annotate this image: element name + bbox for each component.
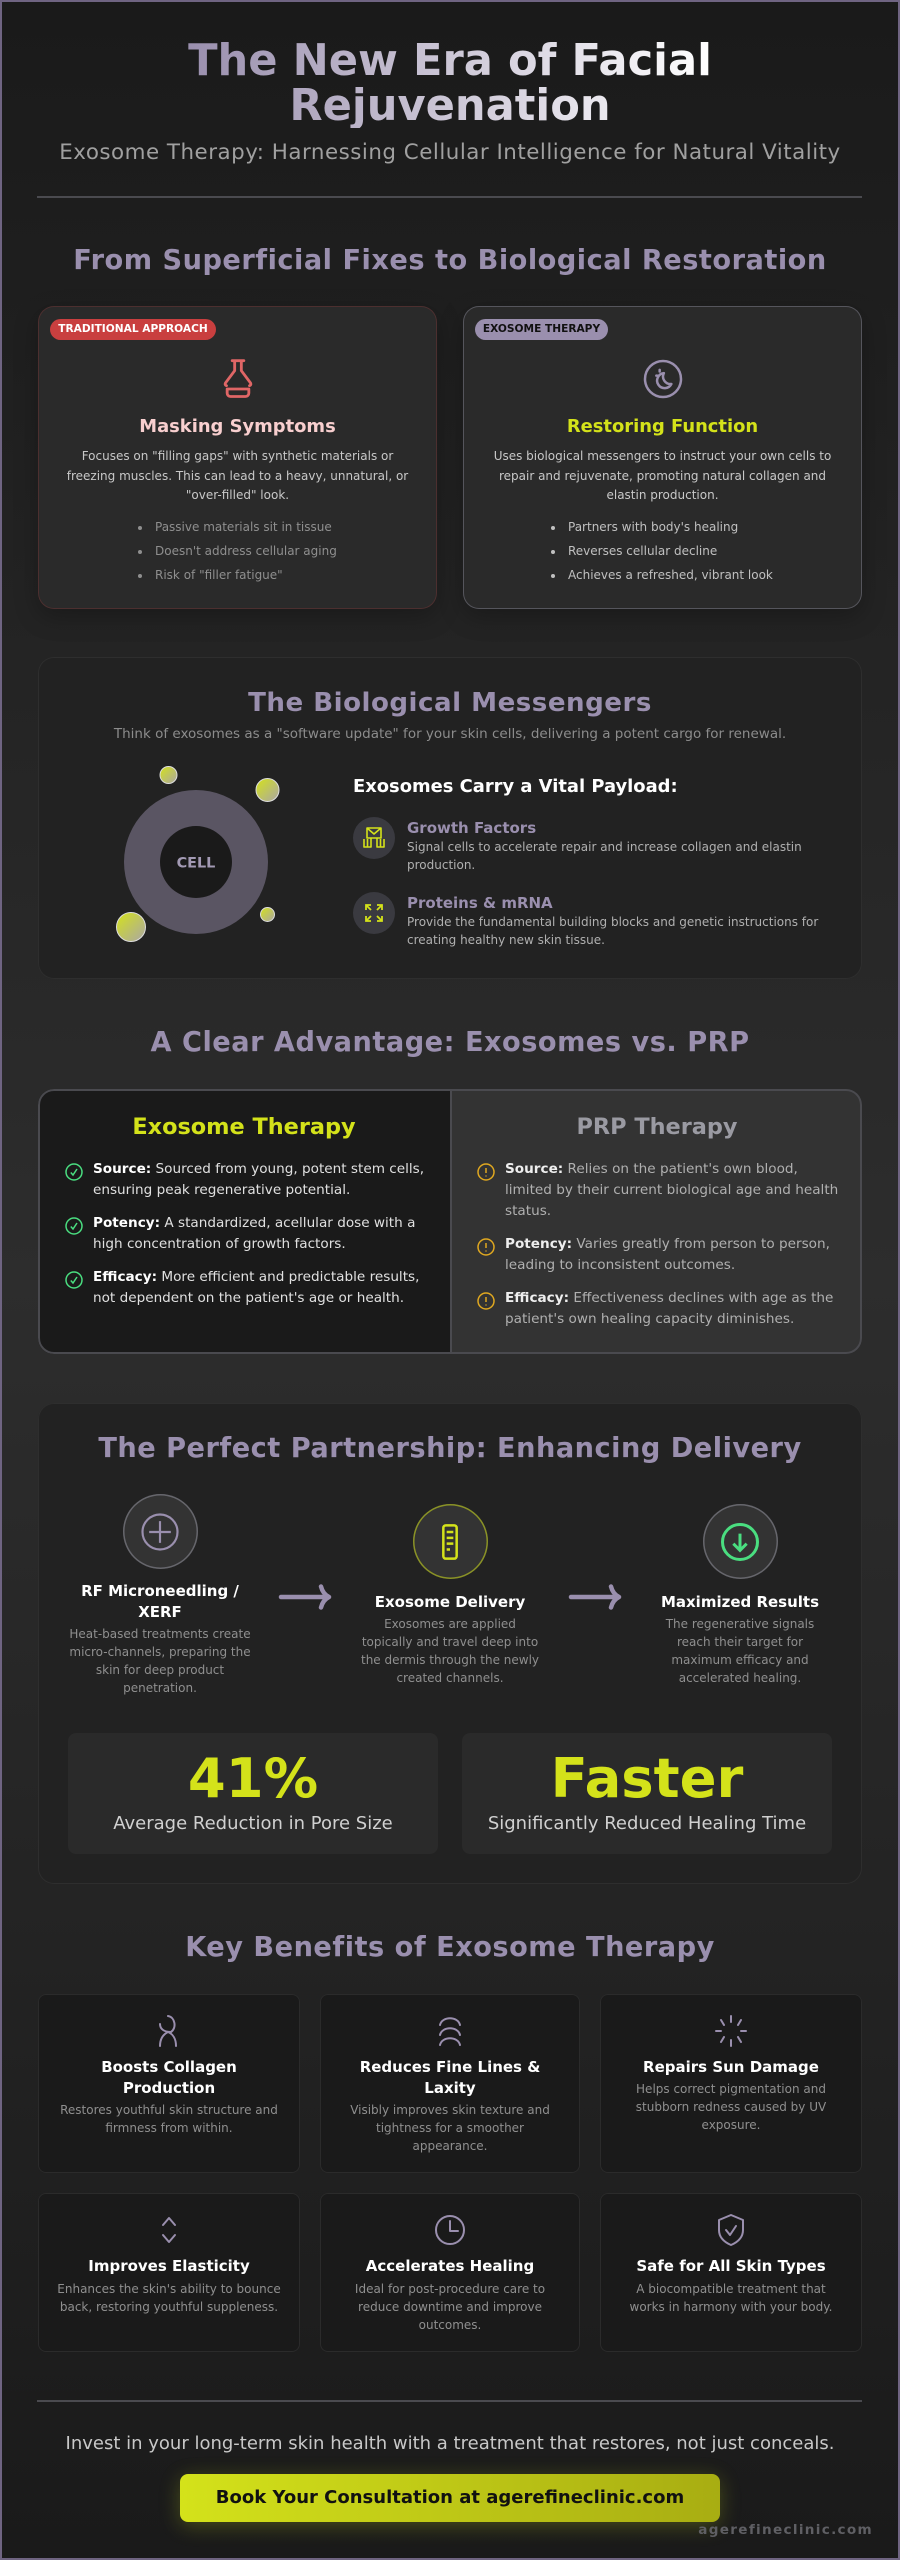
panel: traditional approach bbox=[38, 306, 437, 609]
header bbox=[37, 36, 862, 198]
benefit title: Repairs Sun Damage bbox=[643, 2058, 819, 2076]
stat number: 41% bbox=[188, 1747, 318, 1810]
proteins text bbox=[407, 915, 818, 947]
benefit text bbox=[57, 2282, 281, 2314]
proteins title: Proteins & mRNA bbox=[407, 894, 553, 912]
title: The New Era of Facial bbox=[188, 36, 712, 86]
benefit text: reduce downtime and improve bbox=[358, 2300, 542, 2314]
heading: The Biological Messengers bbox=[248, 688, 652, 718]
badge: traditional approach: TRADITIONAL APPROACH bbox=[58, 323, 208, 335]
stat label: Significantly Reduced Healing Time bbox=[488, 1813, 806, 1834]
panel: exosome therapy bbox=[463, 306, 862, 609]
card description: repair and rejuvenate, promoting natural collagen and bbox=[499, 469, 826, 483]
benefit text bbox=[350, 2103, 550, 2153]
benefit title: Improves Elasticity bbox=[88, 2257, 250, 2275]
call to action button: Book Your Consultation at agerefineclinic.com bbox=[216, 2487, 684, 2508]
badge: traditional approach bbox=[50, 319, 216, 340]
step text: maximum efficacy and bbox=[671, 1653, 809, 1667]
column title: Exosome Therapy bbox=[132, 1114, 356, 1140]
benefit text bbox=[355, 2282, 545, 2332]
badge: exosome therapy: EXOSOME THERAPY bbox=[483, 323, 600, 335]
step text bbox=[361, 1617, 539, 1685]
row: source bbox=[65, 1161, 424, 1198]
list: exosome benefits: Partners with body's healing bbox=[568, 520, 738, 534]
benefit title: Reduces Fine Lines & bbox=[360, 2058, 540, 2076]
row: potency bbox=[477, 1236, 830, 1273]
icon: growth factors bbox=[353, 817, 395, 859]
benefit text: firmness from within. bbox=[105, 2121, 233, 2135]
growth factors text bbox=[407, 840, 802, 872]
stat number: Faster bbox=[551, 1747, 743, 1810]
icon: flask bbox=[224, 359, 252, 398]
step title bbox=[81, 1582, 239, 1621]
benefit text: A biocompatible treatment that bbox=[636, 2282, 826, 2296]
icon: plus circle bbox=[122, 1494, 198, 1569]
row: efficacy: patient's own healing capacity diminishes. bbox=[505, 1311, 794, 1327]
subtitle: Exosome Therapy: Harnessing Cellular Intelligence for Natural Vitality bbox=[59, 140, 841, 165]
row: source: ensuring peak regenerative potential. bbox=[93, 1182, 350, 1198]
step text: Heat-based treatments create bbox=[69, 1627, 251, 1641]
icon: shield check bbox=[718, 2214, 744, 2246]
list: traditional drawbacks: Doesn't address cellular aging bbox=[155, 544, 337, 558]
step text bbox=[666, 1617, 814, 1685]
benefit text: works in harmony with your body. bbox=[630, 2300, 832, 2314]
proteins text: Provide the fundamental building blocks and genetic instructions for bbox=[407, 915, 818, 929]
closing statement: Invest in your long-term skin health with a treatment that restores, not just conceals. bbox=[66, 2433, 834, 2454]
card description bbox=[67, 449, 408, 502]
row: efficacy bbox=[477, 1290, 833, 1327]
card title: Restoring Function bbox=[567, 416, 758, 437]
row: source: status. bbox=[505, 1203, 551, 1219]
footer bbox=[0, 2400, 900, 2550]
growth factors text: production. bbox=[407, 858, 475, 872]
benefit text: tightness for a smoother bbox=[376, 2121, 524, 2135]
growth factors title: Growth Factors bbox=[407, 819, 536, 837]
intro text: Think of exosomes as a "software update" for your skin cells, delivering a potent cargo for renewal. bbox=[114, 726, 786, 742]
benefit text bbox=[636, 2082, 826, 2132]
card description: freezing muscles. This can lead to a heavy, unnatural, or bbox=[67, 469, 408, 483]
benefit text: Enhances the skin's ability to bounce bbox=[57, 2282, 281, 2296]
row: potency: Potency: A standardized, acellular dose with a bbox=[93, 1215, 415, 1231]
row: potency: Potency: Varies greatly from person to person, bbox=[505, 1236, 830, 1252]
list: traditional drawbacks: Risk of "filler fatigue" bbox=[155, 568, 283, 582]
step title: Exosome Delivery bbox=[375, 1592, 525, 1610]
benefit: collagen bbox=[38, 1994, 300, 2173]
header divider bbox=[37, 196, 862, 198]
icon: proteins and mRNA bbox=[353, 892, 395, 934]
step text: skin for deep product bbox=[96, 1663, 224, 1677]
column title: PRP Therapy bbox=[576, 1114, 738, 1140]
row: potency: leading to inconsistent outcomes. bbox=[505, 1257, 735, 1273]
benefit text: Visibly improves skin texture and bbox=[350, 2103, 550, 2117]
stat label: Average Reduction in Pore Size bbox=[113, 1813, 393, 1834]
benefit title: Laxity bbox=[424, 2078, 476, 2096]
icon: collagen strands bbox=[159, 2015, 177, 2047]
badge: exosome therapy bbox=[475, 319, 608, 340]
arrow: step 1 to 2 bbox=[278, 1584, 332, 1610]
step text: The regenerative signals bbox=[666, 1617, 814, 1631]
benefit title bbox=[360, 2058, 540, 2096]
title bbox=[188, 36, 712, 131]
step text: created channels. bbox=[396, 1671, 504, 1685]
card description bbox=[494, 449, 831, 502]
icon: cell restoration bbox=[644, 360, 682, 398]
step text: topically and travel deep into bbox=[362, 1635, 538, 1649]
icon: chevrons bbox=[162, 2217, 176, 2243]
watermark: agerefineclinic.com bbox=[698, 2522, 873, 2538]
panel: the biological messengers bbox=[38, 657, 862, 979]
step: maximized results bbox=[661, 1504, 819, 1685]
card description: Uses biological messengers to instruct your own cells to bbox=[494, 449, 831, 463]
step text: micro-channels, preparing the bbox=[69, 1645, 251, 1659]
row: potency: high concentration of growth factors. bbox=[93, 1236, 346, 1252]
step title: Maximized Results bbox=[661, 1592, 819, 1610]
growth factors text: Signal cells to accelerate repair and increase collagen and elastin bbox=[407, 840, 802, 854]
benefit text: back, restoring youthful suppleness. bbox=[60, 2300, 278, 2314]
benefit title: Production bbox=[123, 2078, 215, 2096]
benefit text: stubborn redness caused by UV bbox=[636, 2100, 826, 2114]
benefit title: Accelerates Healing bbox=[366, 2257, 534, 2275]
benefit text: outcomes. bbox=[419, 2318, 481, 2332]
benefit text: exposure. bbox=[702, 2118, 760, 2132]
list: exosome benefits bbox=[551, 520, 773, 582]
benefit: sun damage bbox=[600, 1994, 862, 2173]
panel: the perfect partnership bbox=[38, 1403, 862, 1884]
card description: "over-filled" look. bbox=[186, 488, 289, 502]
proteins text: creating healthy new skin tissue. bbox=[407, 933, 605, 947]
row: source: Source: Sourced from young, potent stem cells, bbox=[93, 1161, 424, 1177]
benefit: safety bbox=[600, 2193, 862, 2352]
benefit: fine lines bbox=[320, 1994, 580, 2173]
row: source: limited by their current biological age and health bbox=[505, 1182, 838, 1198]
call to action button bbox=[180, 2474, 720, 2522]
heading: key benefits: Key Benefits of Exosome Therapy bbox=[185, 1932, 715, 1963]
card description: elastin production. bbox=[606, 488, 719, 502]
benefit title bbox=[101, 2058, 237, 2096]
benefit text: Helps correct pigmentation and bbox=[636, 2082, 826, 2096]
table border bbox=[38, 1089, 862, 1354]
stat: pore size bbox=[68, 1733, 438, 1854]
step: exosome delivery bbox=[361, 1504, 539, 1685]
benefit title: Boosts Collagen bbox=[101, 2058, 237, 2076]
title: Rejuvenation bbox=[289, 81, 611, 131]
step text: reach their target for bbox=[677, 1635, 803, 1649]
comparison table bbox=[38, 1089, 862, 1354]
step text: the dermis through the newly bbox=[361, 1653, 539, 1667]
row: source: Source: Relies on the patient's own blood, bbox=[505, 1161, 798, 1177]
step title: XERF bbox=[138, 1603, 182, 1621]
icon: sunburst bbox=[715, 2015, 747, 2047]
step: RF microneedling bbox=[69, 1494, 251, 1695]
row: efficacy: not dependent on the patient's age or health. bbox=[93, 1290, 404, 1306]
stat: healing time bbox=[462, 1733, 832, 1854]
benefit text: Ideal for post-procedure care to bbox=[355, 2282, 545, 2296]
benefit title: Safe for All Skin Types bbox=[636, 2257, 826, 2275]
list: exosome benefits: Achieves a refreshed, vibrant look bbox=[568, 568, 773, 582]
column: exosome therapy bbox=[38, 1089, 450, 1354]
list: exosome benefits: Reverses cellular decline bbox=[568, 544, 717, 558]
row: efficacy: Efficacy: More efficient and predictable results, bbox=[93, 1269, 419, 1285]
column: PRP therapy bbox=[450, 1089, 862, 1354]
row: efficacy bbox=[65, 1269, 419, 1306]
benefit text bbox=[630, 2282, 832, 2314]
heading: The Perfect Partnership: Enhancing Delivery bbox=[98, 1433, 802, 1464]
step text bbox=[69, 1627, 251, 1695]
benefit: elasticity bbox=[38, 2193, 300, 2352]
step text: accelerated healing. bbox=[679, 1671, 801, 1685]
heading: clear advantage: A Clear Advantage: Exosomes vs. PRP bbox=[150, 1027, 750, 1058]
row: source bbox=[477, 1161, 838, 1219]
benefit text bbox=[60, 2103, 278, 2135]
list: traditional drawbacks: Passive materials sit in tissue bbox=[155, 520, 332, 534]
step text: penetration. bbox=[123, 1681, 197, 1695]
heading: from superficial fixes: From Superficial Fixes to Biological Restoration bbox=[73, 245, 827, 276]
list: traditional drawbacks bbox=[138, 520, 337, 582]
icon: clock bbox=[435, 2215, 465, 2245]
payload heading: Exosomes Carry a Vital Payload: bbox=[353, 776, 678, 797]
cell diagram bbox=[116, 766, 280, 942]
step title: RF Microneedling / bbox=[81, 1582, 239, 1600]
step text: Exosomes are applied bbox=[384, 1617, 516, 1631]
card title: Masking Symptoms bbox=[139, 416, 336, 437]
row: efficacy: Efficacy: Effectiveness declines with age as the bbox=[505, 1290, 833, 1306]
icon: stacked arcs bbox=[439, 2017, 461, 2046]
footer divider bbox=[37, 2400, 862, 2402]
arrow: step 2 to 3 bbox=[568, 1584, 622, 1610]
card description: Focuses on "filling gaps" with synthetic materials or bbox=[82, 449, 393, 463]
row: potency bbox=[65, 1215, 415, 1252]
cell diagram: CELL bbox=[177, 856, 215, 872]
icon: green arrow circle bbox=[702, 1504, 778, 1579]
benefit text: appearance. bbox=[412, 2139, 488, 2153]
benefit: healing bbox=[320, 2193, 580, 2352]
icon: serum vial bbox=[412, 1504, 488, 1579]
benefit text: Restores youthful skin structure and bbox=[60, 2103, 278, 2117]
